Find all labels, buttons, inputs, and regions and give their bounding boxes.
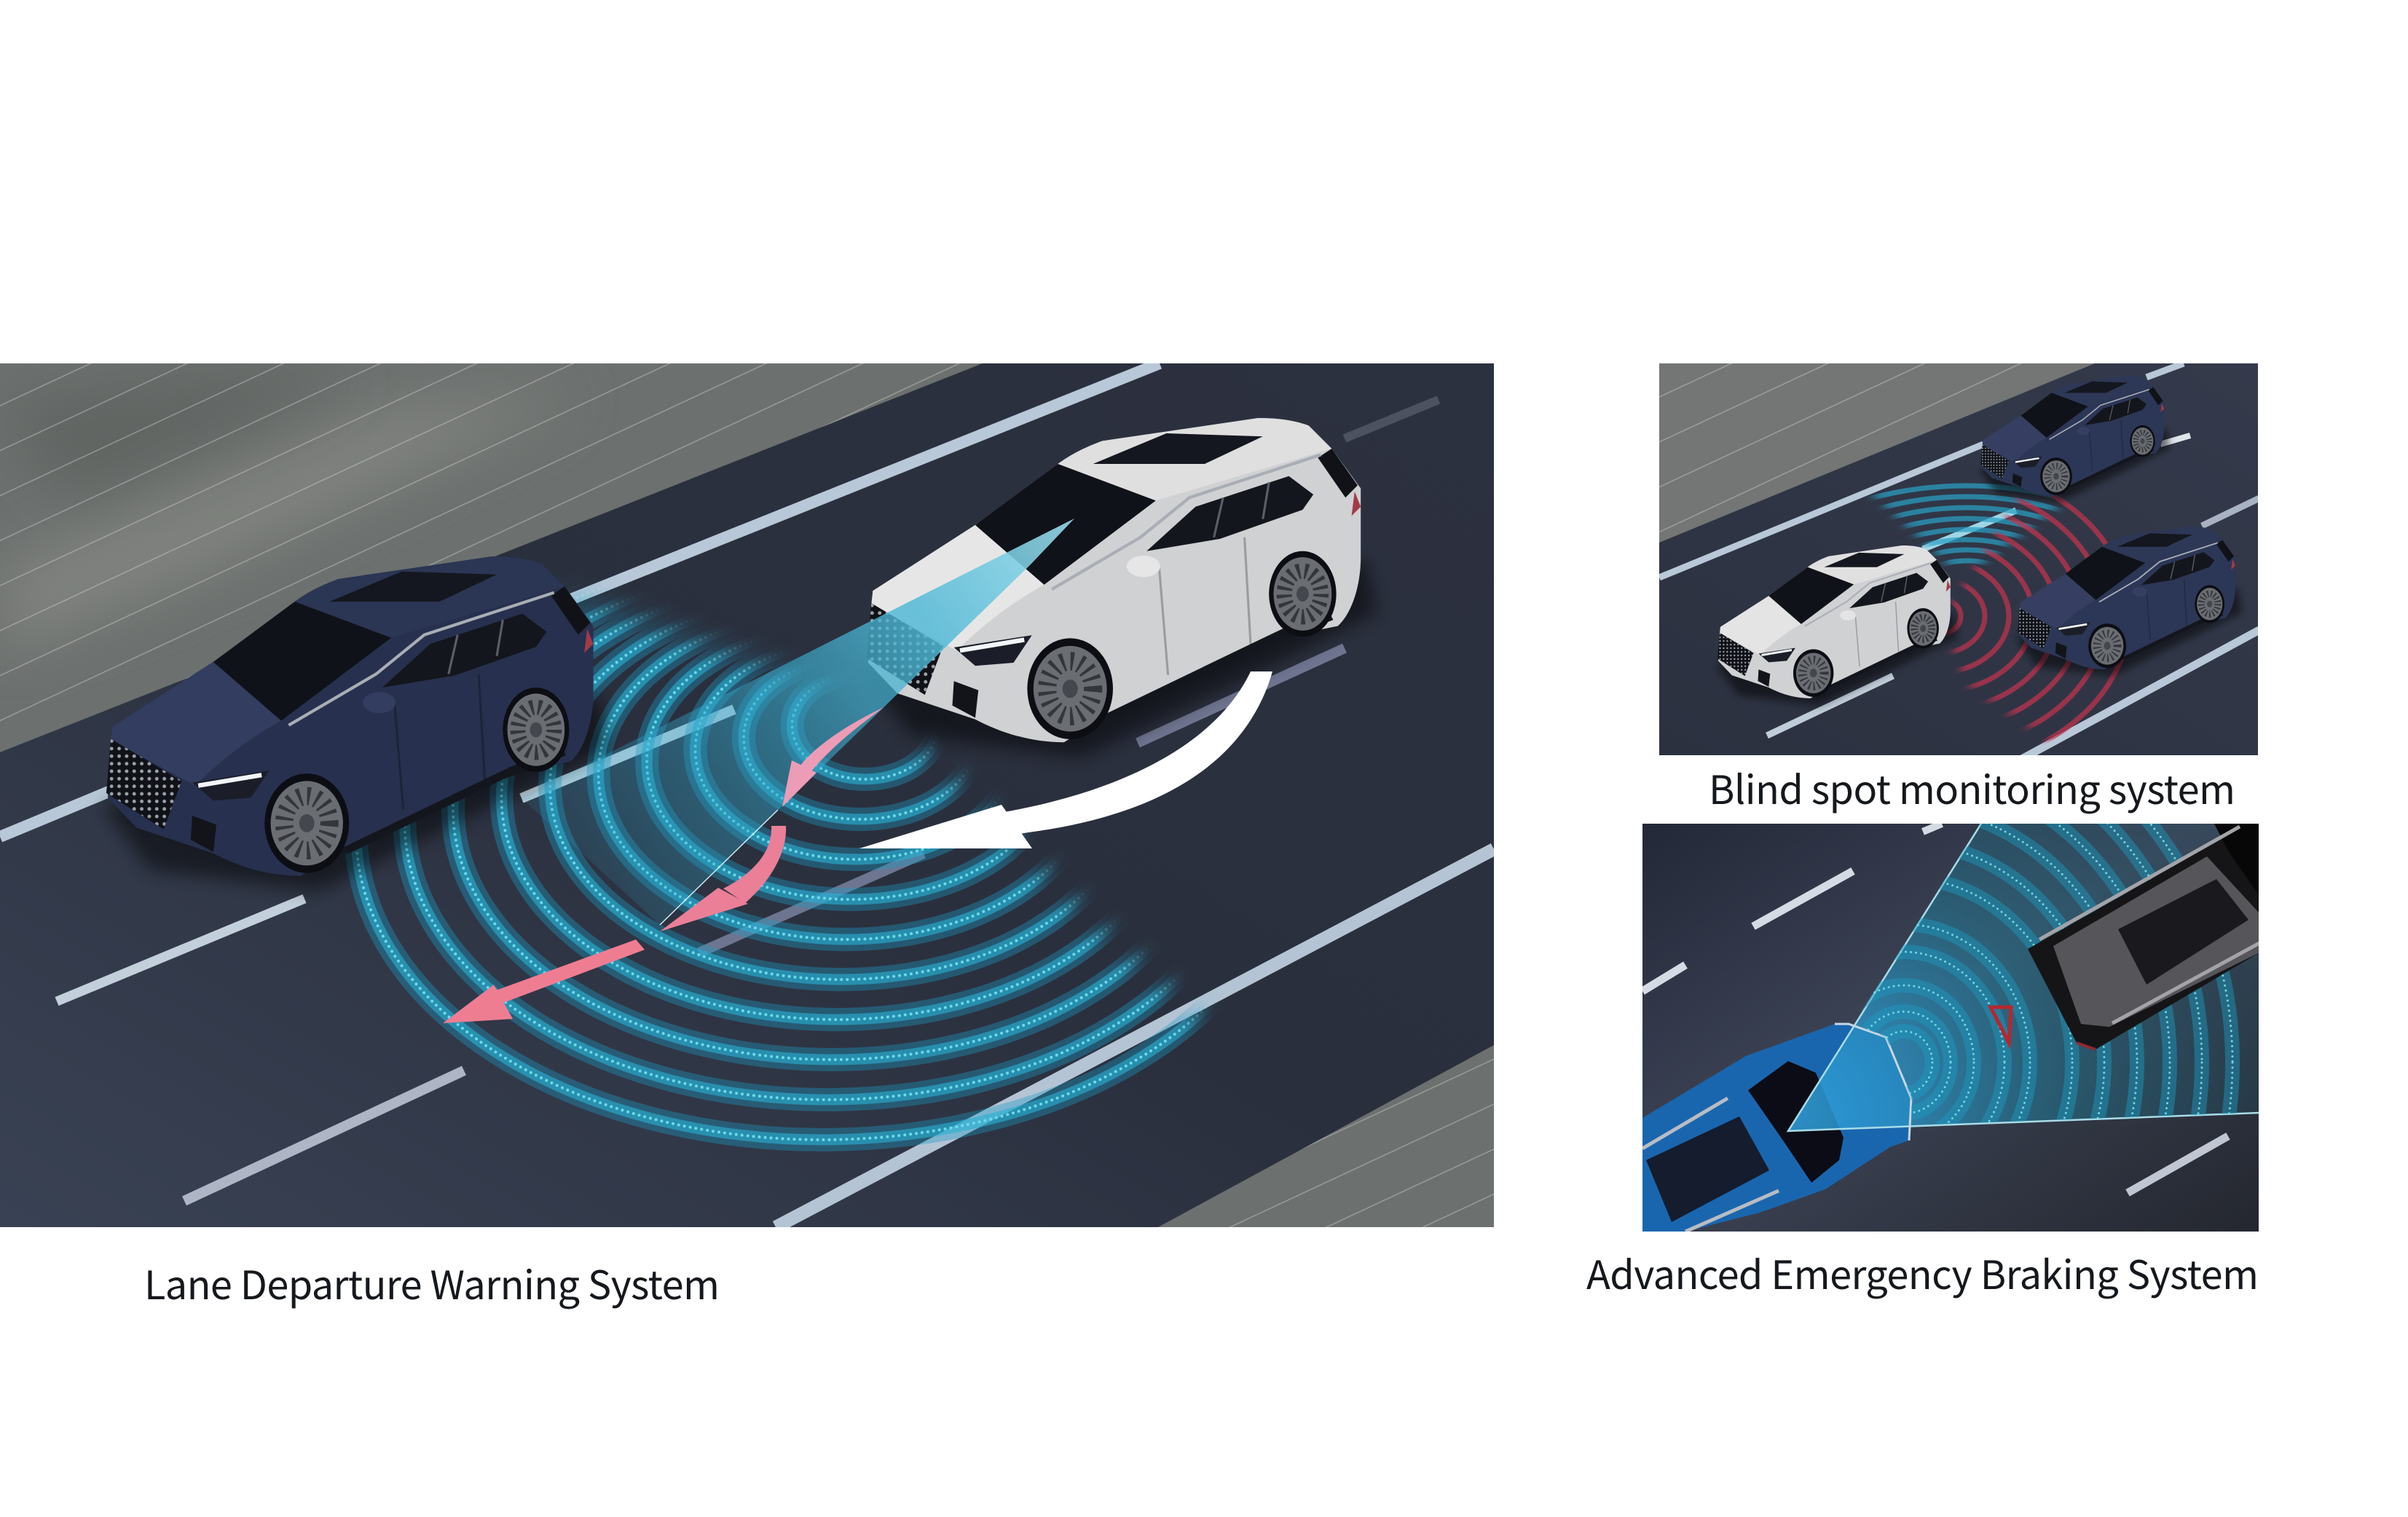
panel: blind spot monitoring bbox=[1659, 363, 2259, 768]
blue car, adjacent lane near bbox=[2015, 527, 2242, 676]
warning triangle bbox=[1991, 1007, 2011, 1043]
camera detection cone bbox=[521, 519, 1074, 925]
white car bbox=[862, 418, 1376, 757]
pink warning arrow, third segment bbox=[443, 939, 645, 1023]
blue car, top view bbox=[1642, 1024, 1911, 1232]
infographic: driver assistance systems bbox=[0, 363, 2259, 1309]
road surface bbox=[1659, 363, 2258, 755]
sensor wave rings bbox=[1575, 701, 2232, 1424]
caption: lane departure warning system: Lane Departure Warning System bbox=[144, 1253, 720, 1311]
roadside concrete, upper left bbox=[0, 363, 983, 752]
pink warning arrow, first segment bbox=[782, 707, 884, 807]
black car, top view bbox=[2028, 824, 2259, 1049]
sensor wave rings bbox=[345, 585, 1215, 1151]
caption: blind spot monitoring system: Blind spot monitoring system bbox=[1709, 758, 2235, 816]
pink warning arrow, second segment bbox=[660, 826, 786, 931]
blue car, adjacent lane far bbox=[1979, 376, 2170, 502]
white curved arrow bbox=[859, 671, 1272, 848]
lane markings bbox=[1642, 824, 2228, 1193]
blue sensor rings bbox=[1773, 486, 2160, 679]
lane markings bbox=[1659, 363, 2259, 760]
blue car bbox=[102, 556, 608, 891]
road surface bbox=[1642, 824, 2259, 1232]
roadside concrete, lower right bbox=[1158, 1045, 1494, 1227]
white car bbox=[1715, 545, 1958, 706]
road surface bbox=[0, 363, 1494, 1227]
roadside concrete bbox=[1659, 363, 2095, 543]
caption: advanced emergency braking system: Advanced Emergency Braking System bbox=[1586, 1243, 2259, 1301]
panel: lane departure warning bbox=[0, 363, 1494, 1227]
panel: advanced emergency braking bbox=[1575, 701, 2259, 1424]
hood outline bbox=[1835, 1024, 1911, 1140]
red sensor rings bbox=[1744, 465, 2129, 768]
lane markings bbox=[0, 363, 1494, 1227]
detection cone bbox=[1788, 824, 2259, 1131]
